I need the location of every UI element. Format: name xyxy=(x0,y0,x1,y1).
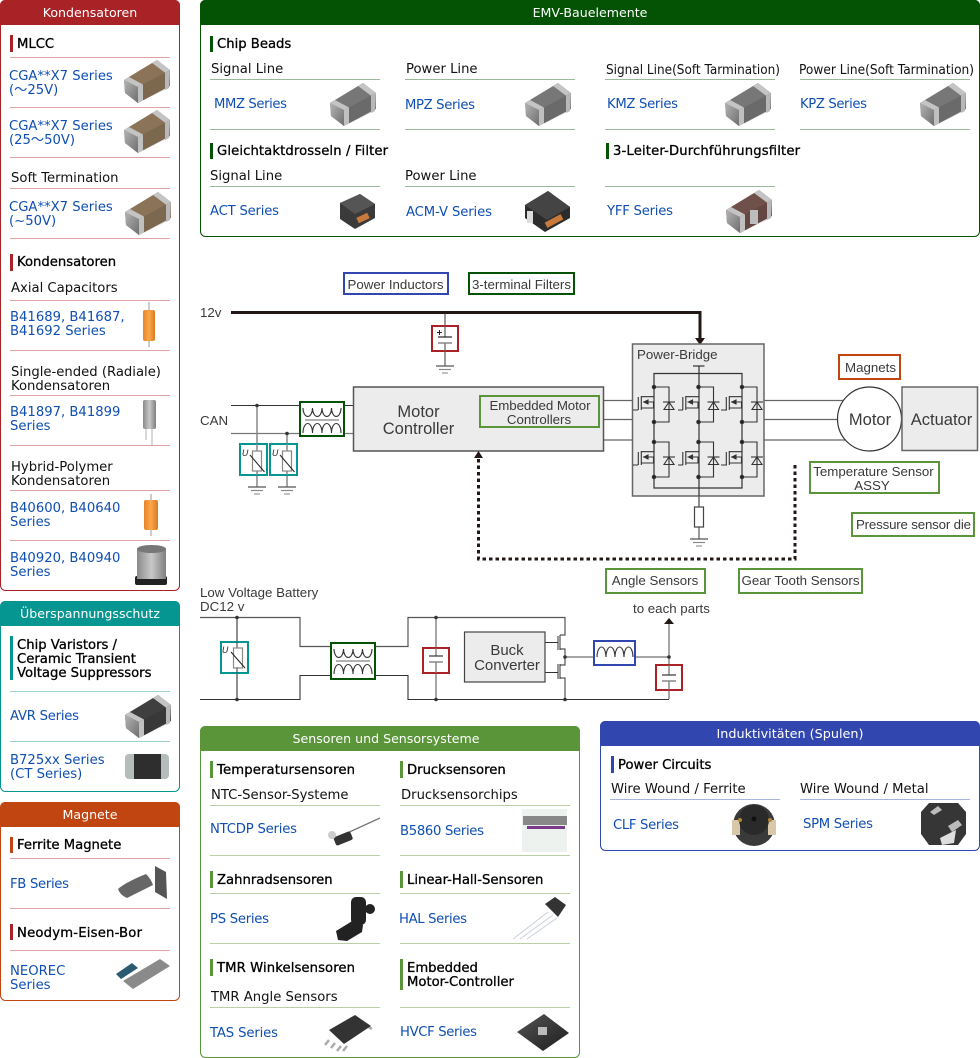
panel: EMV-Bauelemente xyxy=(200,0,980,236)
varistor xyxy=(270,444,297,475)
capacitor xyxy=(423,648,449,673)
arrow: to each parts xyxy=(664,618,674,624)
CAN bus wiring xyxy=(231,404,354,487)
heading: Chip Varistors: Chip Varistors / xyxy=(17,638,117,653)
ground xyxy=(278,487,296,494)
heading: Chip Varistors: Ceramic Transient xyxy=(17,652,136,667)
item: B41897: B41897, B41899 xyxy=(10,405,120,420)
Motor: Motor xyxy=(849,411,892,429)
icon: bead xyxy=(525,83,571,126)
label: Axial Capacitors: Axial Capacitors xyxy=(11,281,118,296)
wires: motor phases xyxy=(603,400,845,440)
item: SPM: SPM Series xyxy=(803,817,873,832)
common mode choke xyxy=(331,643,375,679)
item: MPZ: MPZ Series xyxy=(405,98,475,113)
item: B40600: Series xyxy=(10,515,51,530)
block: Power-Bridge xyxy=(632,344,764,507)
icon: bead xyxy=(920,83,966,126)
header: Kondensatoren xyxy=(0,0,180,25)
item: TAS: TAS Series xyxy=(209,1026,278,1041)
heading: Kondensatoren: Kondensatoren xyxy=(17,255,116,270)
item: B725xx: B725xx Series xyxy=(10,753,105,768)
icon: hybrid capacitor xyxy=(144,494,158,536)
block: Motor Controller: Motor xyxy=(397,403,440,421)
dotted feedback line xyxy=(478,458,795,559)
block: Buck Converter: Buck xyxy=(490,642,524,659)
item: FB: FB Series xyxy=(10,877,69,892)
item: B40920: Series xyxy=(10,565,51,580)
label: Drucksensorchips: Drucksensorchips xyxy=(401,788,518,803)
panel: Sensoren und Sensorsysteme xyxy=(200,726,580,1058)
label: Wire Wound Metal: Wire Wound / Metal xyxy=(800,782,929,797)
label: Single-ended: Kondensatoren xyxy=(11,379,110,394)
icon: MLCC chip xyxy=(124,110,170,153)
item: CGA X7 up to 50V: (~50V) xyxy=(9,214,56,229)
block: Power-Bridge: Power-Bridge xyxy=(637,347,718,362)
label: Wire Wound Ferrite: Wire Wound / Ferrite xyxy=(611,782,746,797)
heading: Linear-Hall: Linear-Hall-Sensoren xyxy=(407,873,543,888)
item: B41689: B41689, B41687, xyxy=(10,310,125,325)
motor drive circuit xyxy=(200,273,978,593)
icon: HVCF package xyxy=(517,1014,569,1051)
icon: axial capacitor xyxy=(143,302,155,347)
tag: Magnets xyxy=(839,355,900,379)
icon: MLCC chip xyxy=(124,60,170,103)
heading: Embedded: Motor-Controller xyxy=(407,975,514,990)
varistor: U xyxy=(222,646,229,656)
label: TMR Angle: TMR Angle Sensors xyxy=(210,990,338,1005)
inductor xyxy=(594,641,635,665)
icon: neodymium magnets xyxy=(116,959,170,989)
Motor xyxy=(838,387,902,451)
tag: Gear Tooth Sensors xyxy=(739,569,862,593)
header: Überspannungsschutz xyxy=(0,601,180,626)
item: CGA X7 up to 50V: CGA**X7 Series xyxy=(9,200,113,215)
header: EMV-Bauelemente xyxy=(200,0,980,25)
label: NTC: NTC-Sensor-Systeme xyxy=(211,788,349,803)
icon: CT chip xyxy=(125,754,169,779)
icon: NTC probe xyxy=(328,818,380,846)
icon: ACM choke xyxy=(525,191,570,232)
item: B41897: Series xyxy=(10,419,51,434)
header: Magnete: Magnete xyxy=(62,807,118,822)
tag: Angle Sensors xyxy=(606,569,705,593)
tag: Temperature Sensor ASSY: Temperature Sensor xyxy=(813,464,934,479)
heading: Gleichtaktdrosseln: Gleichtaktdrosseln / Filter xyxy=(217,144,389,159)
item: NEOREC: Series xyxy=(10,978,51,993)
item: CGA X7 25 to 50V: (25～50V) xyxy=(9,133,75,148)
item: KMZ: KMZ Series xyxy=(607,97,678,112)
heading: Power Circuits: Power Circuits xyxy=(618,758,712,773)
item: NEOREC: NEOREC xyxy=(10,964,65,979)
heading: TMR: TMR Winkelsensoren xyxy=(216,961,355,976)
item: HVCF: HVCF Series xyxy=(400,1025,477,1040)
label: Signal Line: Signal Line xyxy=(210,169,282,184)
tag: Power Inductors: Power Inductors xyxy=(347,277,444,292)
item: CGA X7 25 to 50V: CGA**X7 Series xyxy=(9,119,113,134)
heading: Chip Beads: Chip Beads xyxy=(217,37,291,52)
tag: Embedded Motor Controllers: Controllers xyxy=(507,412,571,427)
icon: AVR chip xyxy=(125,695,171,738)
buck converter circuit xyxy=(200,585,710,701)
label: Power Line: Power Line xyxy=(405,169,477,184)
block: Buck Converter xyxy=(464,632,545,682)
icon: SPM inductor xyxy=(921,803,966,845)
panel: Magnete xyxy=(0,802,180,1000)
icon: radial capacitor xyxy=(143,400,156,445)
arrow: supply into bridge xyxy=(695,338,705,345)
tag: Gear Tooth Sensors: Gear Tooth Sensors xyxy=(741,573,860,588)
heading: Drucksensoren: Drucksensoren xyxy=(407,763,506,778)
item: B41689: B41692 Series xyxy=(10,324,106,339)
icon: bead xyxy=(725,83,771,126)
label: Signal Line: Signal Line xyxy=(211,62,283,77)
label: battery: Low Voltage Battery xyxy=(200,585,319,600)
icon: TAS package xyxy=(325,1015,372,1051)
wiring xyxy=(200,616,671,701)
icon: CLF inductor xyxy=(732,804,776,846)
tag: 3-terminal Filters xyxy=(469,273,574,294)
heading: Chip Varistors: Voltage Suppressors xyxy=(17,666,152,681)
item: KPZ: KPZ Series xyxy=(800,97,867,112)
varistor xyxy=(240,444,267,475)
icon: SMD capacitor xyxy=(135,545,167,585)
varistor: U xyxy=(272,449,279,459)
Actuator xyxy=(902,387,978,450)
block: Motor Controller xyxy=(354,387,604,451)
label: Signal Line Soft: Signal Line(Soft Tarmination) xyxy=(606,63,780,78)
icon: bead xyxy=(330,83,376,126)
panel: Induktivitäten xyxy=(600,721,980,850)
item: PS: PS Series xyxy=(210,912,269,927)
icon: MLCC chip xyxy=(125,192,171,235)
item: B40600: B40600, B40640 xyxy=(10,501,120,516)
item: CGA X7 up to 25V: (～25V) xyxy=(9,83,58,98)
varistor xyxy=(221,642,248,673)
ground xyxy=(248,487,266,494)
block: Motor Controller: Controller xyxy=(383,420,455,438)
heading: Embedded xyxy=(400,959,514,990)
label: to each parts: to each parts xyxy=(633,601,710,616)
label: DC12 v: DC12 v xyxy=(200,599,245,614)
heading: Zahnradsensoren: Zahnradsensoren xyxy=(217,873,333,888)
icon: gear sensor xyxy=(336,897,375,941)
heading: Temperatursensoren: Temperatursensoren xyxy=(216,763,355,778)
item: B40920: B40920, B40940 xyxy=(10,551,120,566)
varistor: U xyxy=(242,449,249,459)
heading: 3-Leiter: 3-Leiter-Durchführungsfilter xyxy=(613,144,801,159)
input capacitor xyxy=(432,314,458,373)
label: Hybrid-Polymer: Kondensatoren xyxy=(11,474,110,489)
label: Single-ended: Single-ended (Radiale) xyxy=(11,365,161,380)
tag: 3-terminal Filters: 3-terminal Filters xyxy=(472,277,571,292)
item: AVR: AVR Series xyxy=(10,709,79,724)
heading: Ferrite Magnete: Ferrite Magnete xyxy=(17,838,121,853)
icon: YFF chip xyxy=(726,190,772,233)
wire: 12v supply xyxy=(231,312,700,339)
header: Induktivitäten xyxy=(600,721,980,746)
header: Magnete xyxy=(0,802,180,827)
shunt resistor and ground xyxy=(690,496,708,546)
item: YFF: YFF Series xyxy=(606,204,673,219)
header: Induktivitäten: Induktivitäten (Spulen) xyxy=(716,726,864,741)
tag: Angle Sensors: Angle Sensors xyxy=(612,573,699,588)
label: Power Line: Power Line xyxy=(406,62,478,77)
label: Soft Termination: Soft Termination xyxy=(11,171,119,186)
item: B725xx: (CT Series) xyxy=(10,767,82,782)
tag: Embedded Motor Controllers: Embedded Motor xyxy=(490,398,591,413)
tag: Magnets: Magnets xyxy=(845,360,896,375)
heading: Neodym-Eisen-Bor: Neodym-Eisen-Bor xyxy=(17,926,143,941)
heading: Embedded: Embedded xyxy=(407,961,478,976)
heading: MLCC: MLCC xyxy=(17,37,54,52)
tag: Pressure sensor die xyxy=(852,513,974,536)
arrow: feedback into controller xyxy=(474,451,483,458)
header: Kondensatoren: Kondensatoren xyxy=(43,5,137,20)
heading: Chip Varistors xyxy=(10,636,152,681)
item: NTCDP: NTCDP Series xyxy=(210,822,297,837)
panel: Kondensatoren xyxy=(0,0,180,590)
icon: ferrite magnets xyxy=(118,866,167,899)
item: MMZ: MMZ Series xyxy=(214,97,287,112)
item: CLF: CLF Series xyxy=(613,818,679,833)
panel: Überspannungsschutz xyxy=(0,601,180,792)
tag: Temperature Sensor ASSY xyxy=(810,462,939,493)
tag: Embedded Motor Controllers xyxy=(480,396,599,427)
icon: pressure die xyxy=(522,809,567,852)
item: ACT: ACT Series xyxy=(210,204,279,219)
tag: Power Inductors xyxy=(344,273,448,294)
Actuator: Actuator xyxy=(911,411,973,429)
header: EMV-Bauelemente: EMV-Bauelemente xyxy=(533,5,648,20)
tag: Temperature Sensor ASSY: ASSY xyxy=(854,478,890,493)
item: HAL: HAL Series xyxy=(399,912,467,927)
block: Buck Converter: Converter xyxy=(474,657,540,674)
header: Überspannungsschutz: Überspannungsschutz xyxy=(20,605,160,621)
icon: Hall sensor xyxy=(513,897,566,939)
common mode choke on CAN xyxy=(300,402,344,436)
label: Hybrid-Polymer: Hybrid-Polymer xyxy=(11,460,113,475)
icon: ACT choke xyxy=(340,194,375,229)
header: Sensoren: Sensoren und Sensorsysteme xyxy=(292,731,480,746)
tag: Pressure sensor die: Pressure sensor die xyxy=(856,517,971,532)
capacitor xyxy=(656,665,682,690)
item: ACM-V: ACM-V Series xyxy=(406,205,492,220)
item: B5860: B5860 Series xyxy=(400,824,484,839)
label: CAN: CAN xyxy=(200,413,228,428)
item: CGA X7 up to 25V: CGA**X7 Series xyxy=(9,69,113,84)
header: Sensoren xyxy=(200,726,580,751)
label: 12v: 12v xyxy=(200,305,222,320)
